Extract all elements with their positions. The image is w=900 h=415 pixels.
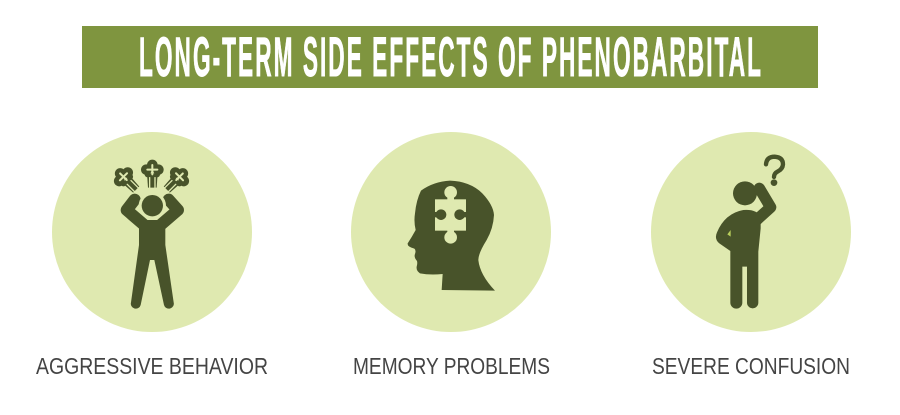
label: aggressive behavior: AGGRESSIVE BEHAVIOR (36, 353, 268, 379)
circle background (52, 132, 252, 332)
icon: angry person with steam (108, 160, 195, 309)
label: severe confusion: SEVERE CONFUSION (652, 353, 850, 379)
circle background (351, 132, 551, 332)
icon: confused person with question mark (716, 157, 783, 309)
panel: aggressive behavior (36, 132, 268, 379)
label: memory problems: MEMORY PROBLEMS (353, 353, 550, 379)
title banner (82, 25, 818, 88)
icon: head with puzzle piece (408, 181, 495, 291)
panel: memory problems (351, 132, 551, 379)
panel: severe confusion (651, 132, 851, 379)
circle background (651, 132, 851, 332)
